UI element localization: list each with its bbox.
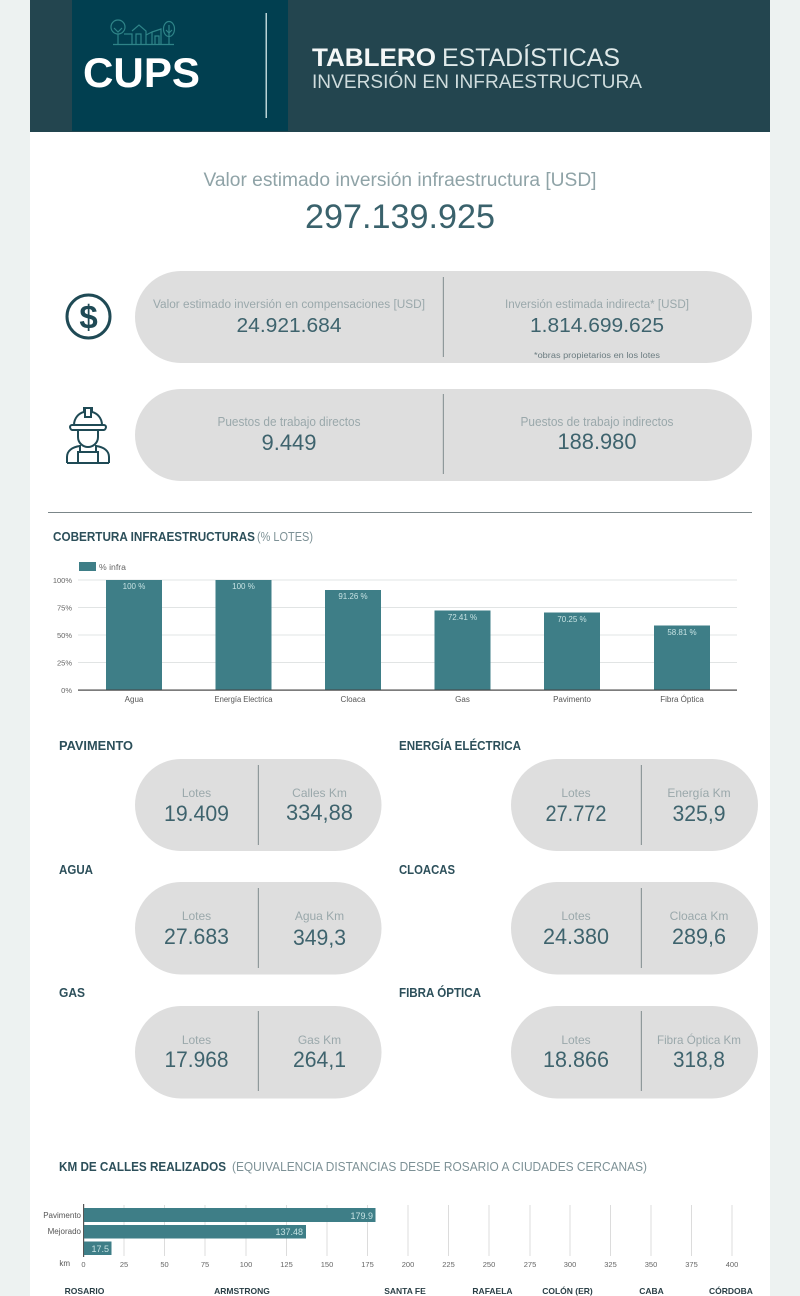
bar chart: km of streets: 137.48 [275,1227,303,1237]
bar chart: km of streets: 375 [685,1260,698,1269]
panel: energía eléctrica: Lotes [561,786,591,800]
bar chart: coverage: Agua [125,695,144,704]
bar chart: coverage: 58.81 % [667,628,697,637]
main statistic: 297.139.925 [305,198,495,236]
panel: investment: Valor estimado inversión en compensaciones [USD] [153,299,425,311]
header title: INVERSIÓN EN INFRAESTRUCTURA [312,70,642,93]
panel: jobs: Puestos de trabajo indirectos [520,415,674,429]
bar chart: km of streets [43,1204,753,1296]
bar chart: km of streets: km [59,1259,70,1268]
city labels: COLÓN (ER) [542,1285,593,1296]
panel: gas: 17.968 [164,1047,228,1072]
panel: pavimento [59,739,382,851]
bar chart: km of streets: 25 [120,1260,128,1269]
logo: CUPS [83,20,200,96]
bar chart: km of streets: Pavimento [43,1211,82,1220]
panel: energía eléctrica: ENERGÍA ELÉCTRICA [399,738,521,753]
panel: investment [135,271,752,363]
bar chart: km of streets: 50 [160,1260,169,1269]
bar chart: coverage: 100% [53,576,72,585]
panel: pavimento: 19.409 [164,801,229,826]
icon: dollar coin: $ [79,298,98,336]
panel: agua: Agua Km [295,909,344,923]
logo: CUPS: CUPS [83,49,200,96]
bar chart: km of streets: 400 [726,1260,738,1269]
bar chart: km of streets: 300 [564,1260,576,1269]
bar chart: km of streets: 325 [604,1260,617,1269]
panel: gas [59,986,382,1098]
panel: fibra óptica [399,985,758,1098]
panel: pavimento: Calles Km [292,786,347,800]
panel: cloacas: 24.380 [543,924,609,949]
bar chart: coverage: 72.41 % [448,613,477,622]
bar chart: km of streets: 179.9 [350,1211,373,1221]
bar chart: km of streets: 0 [81,1260,86,1269]
panel: gas: GAS [59,986,85,1000]
panel: gas: Lotes [182,1033,211,1047]
bar chart: km of streets: 125 [280,1260,293,1269]
city labels: SANTA FE [384,1286,426,1296]
chart legend [79,562,127,572]
city labels: RAFAELA [472,1286,513,1296]
city labels: ARMSTRONG [214,1286,270,1296]
heading: km of streets [59,1160,647,1174]
bar chart: km of streets: 100 [240,1260,252,1269]
header title: ESTADÍSTICAS [442,43,620,72]
panel: pavimento: Lotes [182,786,211,800]
panel: jobs: Puestos de trabajo directos [218,415,360,429]
panel: jobs [135,389,752,481]
city labels: ROSARIO [65,1286,105,1296]
panel: energía eléctrica [399,738,758,851]
bar chart: km of streets: 275 [524,1260,536,1269]
panel: fibra óptica: 318,8 [673,1047,725,1072]
bar chart: km of streets: 225 [442,1260,455,1269]
panel: agua: AGUA [59,863,93,877]
panel: jobs: 9.449 [262,430,316,455]
panel: fibra óptica: FIBRA ÓPTICA [399,985,481,1000]
main statistic [204,170,596,236]
heading: km of streets: (EQUIVALENCIA DISTANCIAS DESDE ROSARIO A CIUDADES CERCANAS) [232,1160,647,1174]
bar chart: coverage [53,562,737,704]
panel: investment: *obras propietarios en los lotes [534,351,660,360]
bar chart: km of streets: 150 [321,1260,333,1269]
panel: gas: Gas Km [298,1033,341,1047]
bar chart: coverage: Fibra Óptica [660,695,704,704]
bar chart: coverage: 75% [57,604,72,612]
bar chart: coverage: 91.26 % [338,592,368,601]
bar chart: km of streets: 17.5 [91,1244,109,1254]
panel: cloacas: CLOACAS [399,863,455,877]
header banner [30,0,770,132]
bar chart: km of streets: 75 [201,1260,209,1269]
panel: cloacas: Cloaca Km [670,909,728,923]
bar chart: coverage: 50% [57,631,72,640]
icon: construction worker [67,408,109,463]
city labels: CÓRDOBA [709,1285,753,1296]
panel: gas: 264,1 [293,1047,346,1072]
bar chart: km of streets: 200 [402,1260,414,1269]
icon: dollar coin [67,295,110,338]
bar chart: coverage: Gas [455,695,470,704]
bar chart: km of streets: 175 [361,1260,374,1269]
panel: fibra óptica: Lotes [561,1033,591,1047]
panel: agua [59,863,382,974]
heading: coverage: COBERTURA INFRAESTRUCTURAS [53,530,255,544]
bar chart: km of streets: Mejorado [48,1227,82,1236]
panel: energía eléctrica: 325,9 [672,801,726,826]
header title [312,43,642,93]
panel: agua: 27.683 [164,924,229,949]
bar chart: coverage: 25% [57,658,72,668]
panel: energía eléctrica: Energía Km [667,786,731,800]
panel: pavimento: 334,88 [286,800,353,825]
bar chart: coverage: Energía Electrica [214,695,273,704]
panel: cloacas: 289,6 [672,924,726,949]
city labels: CABA [639,1286,664,1296]
bar chart: coverage: 0% [61,686,72,695]
header title: TABLERO [312,44,436,72]
heading: coverage: (% LOTES) [257,530,313,544]
panel: energía eléctrica: 27.772 [546,801,606,826]
panel: pavimento: PAVIMENTO [59,739,133,753]
panel: fibra óptica: 18.866 [543,1047,609,1072]
panel: agua: Lotes [182,909,211,923]
panel: cloacas [399,863,758,974]
bar chart: coverage: 100 % [232,582,255,591]
panel: investment: 1.814.699.625 [530,315,664,337]
main statistic: Valor estimado inversión infraestructura [USD] [204,170,596,191]
bar chart: coverage: Pavimento [553,695,591,704]
bar chart: km of streets: 350 [645,1260,657,1269]
bar chart: coverage: Cloaca [341,695,366,704]
panel: investment: 24.921.684 [236,315,342,337]
heading: km of streets: KM DE CALLES REALIZADOS [59,1160,226,1174]
panel: cloacas: Lotes [561,909,591,923]
bar chart: coverage: 100 % [123,582,145,591]
city labels [65,1285,753,1296]
panel: jobs: 188.980 [558,429,636,454]
bar chart: km of streets: 250 [483,1260,495,1269]
bar chart: coverage: 70.25 % [557,615,587,624]
chart legend: % infra [99,563,127,572]
panel: investment: Inversión estimada indirecta* [USD] [505,299,689,311]
panel: fibra óptica: Fibra Óptica Km [657,1032,741,1047]
panel: agua: 349,3 [293,925,346,950]
